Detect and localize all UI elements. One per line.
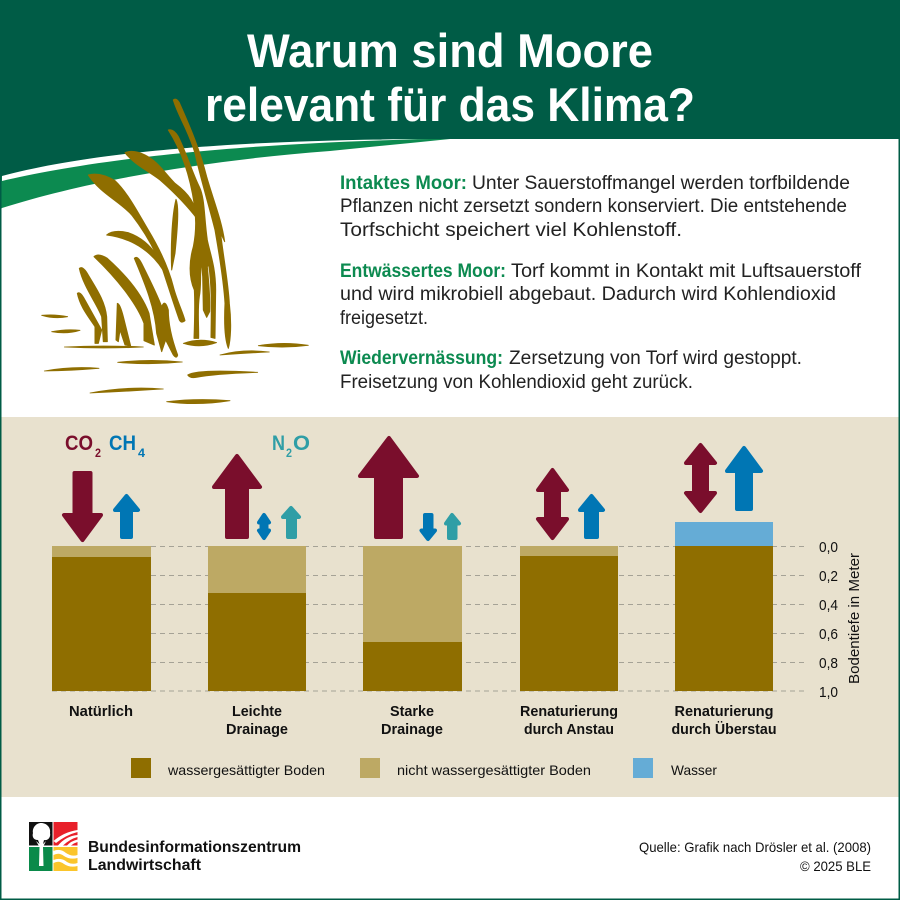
illustration: reeds in water: [42, 99, 308, 404]
label: Natürlich: Natürlich: [69, 703, 133, 720]
arrow: CH4 up, Anstau: [580, 496, 603, 537]
axis title: Bodentiefe in Meter: [846, 553, 863, 684]
bar: Leichte Drainage: [208, 546, 306, 691]
label: Renaturierung durch Anstau: durch Anstau: [524, 721, 614, 738]
source and copyright: [639, 839, 871, 874]
legend gas: N2O: 2: [286, 446, 292, 460]
axis labels: [819, 539, 838, 701]
legend gas: CO2: CO: [65, 432, 93, 455]
axis labels: 0,8: [819, 655, 838, 672]
arrow: N2O up, Starke Drainage: [446, 515, 459, 538]
title: [205, 24, 695, 131]
label: Leichte Drainage: [226, 703, 288, 738]
legend gas: N2O: O: [293, 432, 310, 455]
logo text: Landwirtschaft: [88, 857, 202, 874]
text block: Intaktes Moor: Intaktes Moor:: [340, 173, 467, 194]
legend gas: CH4: [109, 432, 145, 460]
text block: Entwässertes Moor: Entwässertes Moor:: [340, 261, 506, 282]
label: Starke Drainage: [381, 703, 443, 738]
legend: water-saturated soil: wassergesättigter Boden: [167, 762, 325, 778]
legend: unsaturated soil: [360, 758, 591, 778]
text block: Wiedervernässung: Zersetzung von Torf wird gestoppt.: [509, 348, 802, 369]
text block: Intaktes Moor: Unter Sauerstoffmangel werden torfbildende: [472, 173, 850, 194]
arrow: CO2 up, Leichte Drainage: [214, 456, 260, 537]
text block: Entwässertes Moor: freigesetzt.: [340, 308, 428, 329]
logo mark: [29, 822, 78, 871]
axis labels: 0,6: [819, 626, 838, 643]
legend: water: Wasser: [671, 762, 717, 778]
axis labels: 1,0: [819, 684, 838, 701]
title: relevant für das Klima?: [205, 78, 695, 131]
arrow: CH4 up, Überstau: [727, 448, 761, 509]
bar: Renaturierung durch Anstau: [520, 546, 618, 691]
text block: Entwässertes Moor: Torf kommt in Kontakt mit Luftsauerstoff: [511, 261, 862, 282]
label: Renaturierung durch Überstau: [672, 703, 776, 738]
text block: Intaktes Moor: Pflanzen nicht zersetzt sondern konserviert. Die entstehende: [340, 196, 847, 217]
arrow: CO2 both, Anstau: [538, 470, 567, 538]
legend gas: CH4: 4: [138, 446, 145, 460]
legend gas: CO2: 2: [95, 446, 101, 460]
text block: Intaktes Moor: [340, 173, 850, 241]
arrow: CO2 up, Starke Drainage: [360, 438, 417, 537]
text block: Entwässertes Moor: und wird mikrobiell abgebaut. Dadurch wird Kohlendioxid: [340, 284, 836, 305]
label: Renaturierung durch Anstau: [520, 703, 618, 738]
label: Leichte Drainage: Leichte: [232, 703, 282, 720]
legend: water-saturated soil: [131, 758, 325, 778]
bar: Renaturierung durch Überstau: [675, 522, 773, 691]
arrow: CO2 down, Natürlich: [64, 473, 101, 540]
bar: Starke Drainage: [363, 546, 462, 691]
label: Starke Drainage: Starke: [390, 703, 434, 720]
axis labels: 0,2: [819, 568, 838, 585]
header background with swoosh: [0, 0, 900, 210]
label: Leichte Drainage: Drainage: [226, 721, 288, 738]
axis labels: 0,0: [819, 539, 838, 556]
arrow: N2O up, Leichte Drainage: [283, 508, 299, 537]
title: Warum sind Moore: [247, 24, 653, 77]
text block: Entwässertes Moor: [340, 261, 862, 329]
text block: Wiedervernässung: Wiedervernässung:: [340, 348, 503, 369]
legend gas: N2O: N: [272, 432, 285, 455]
arrow: CH4 down, Starke Drainage: [422, 515, 435, 539]
logo text: Bundesinformationszentrum: [88, 839, 301, 856]
arrow: CO2 both, Überstau: [686, 445, 715, 511]
bar: Natürlich: [52, 546, 151, 691]
legend: water: [633, 758, 717, 778]
axis labels: 0,4: [819, 597, 838, 614]
arrow: CH4 both, Leichte Drainage: [259, 515, 269, 538]
source and copyright: Quelle: Grafik nach Drösler et al. (2008): [639, 839, 871, 855]
label: Starke Drainage: Drainage: [381, 721, 443, 738]
source and copyright: © 2025 BLE: [800, 858, 871, 874]
text block: Intaktes Moor: Torfschicht speichert viel Kohlenstoff.: [340, 220, 682, 241]
panel: soil chart background: [0, 417, 900, 797]
legend: unsaturated soil: nicht wassergesättigter Boden: [397, 762, 591, 778]
logo text: [88, 839, 301, 874]
text block: Wiedervernässung: Freisetzung von Kohlendioxid geht zurück.: [340, 372, 693, 393]
arrow: CH4 up, Natürlich: [115, 496, 138, 537]
legend gas: CH4: CH: [109, 432, 136, 455]
text block: Wiedervernässung: [340, 348, 802, 393]
label: Renaturierung durch Anstau: Renaturierung: [520, 703, 618, 720]
legend gas: N2O: [272, 432, 310, 460]
label: Renaturierung durch Überstau: durch Überstau: [672, 721, 776, 738]
depth grid lines: [52, 546, 808, 691]
label: Renaturierung durch Überstau: Renaturierung: [674, 703, 774, 720]
